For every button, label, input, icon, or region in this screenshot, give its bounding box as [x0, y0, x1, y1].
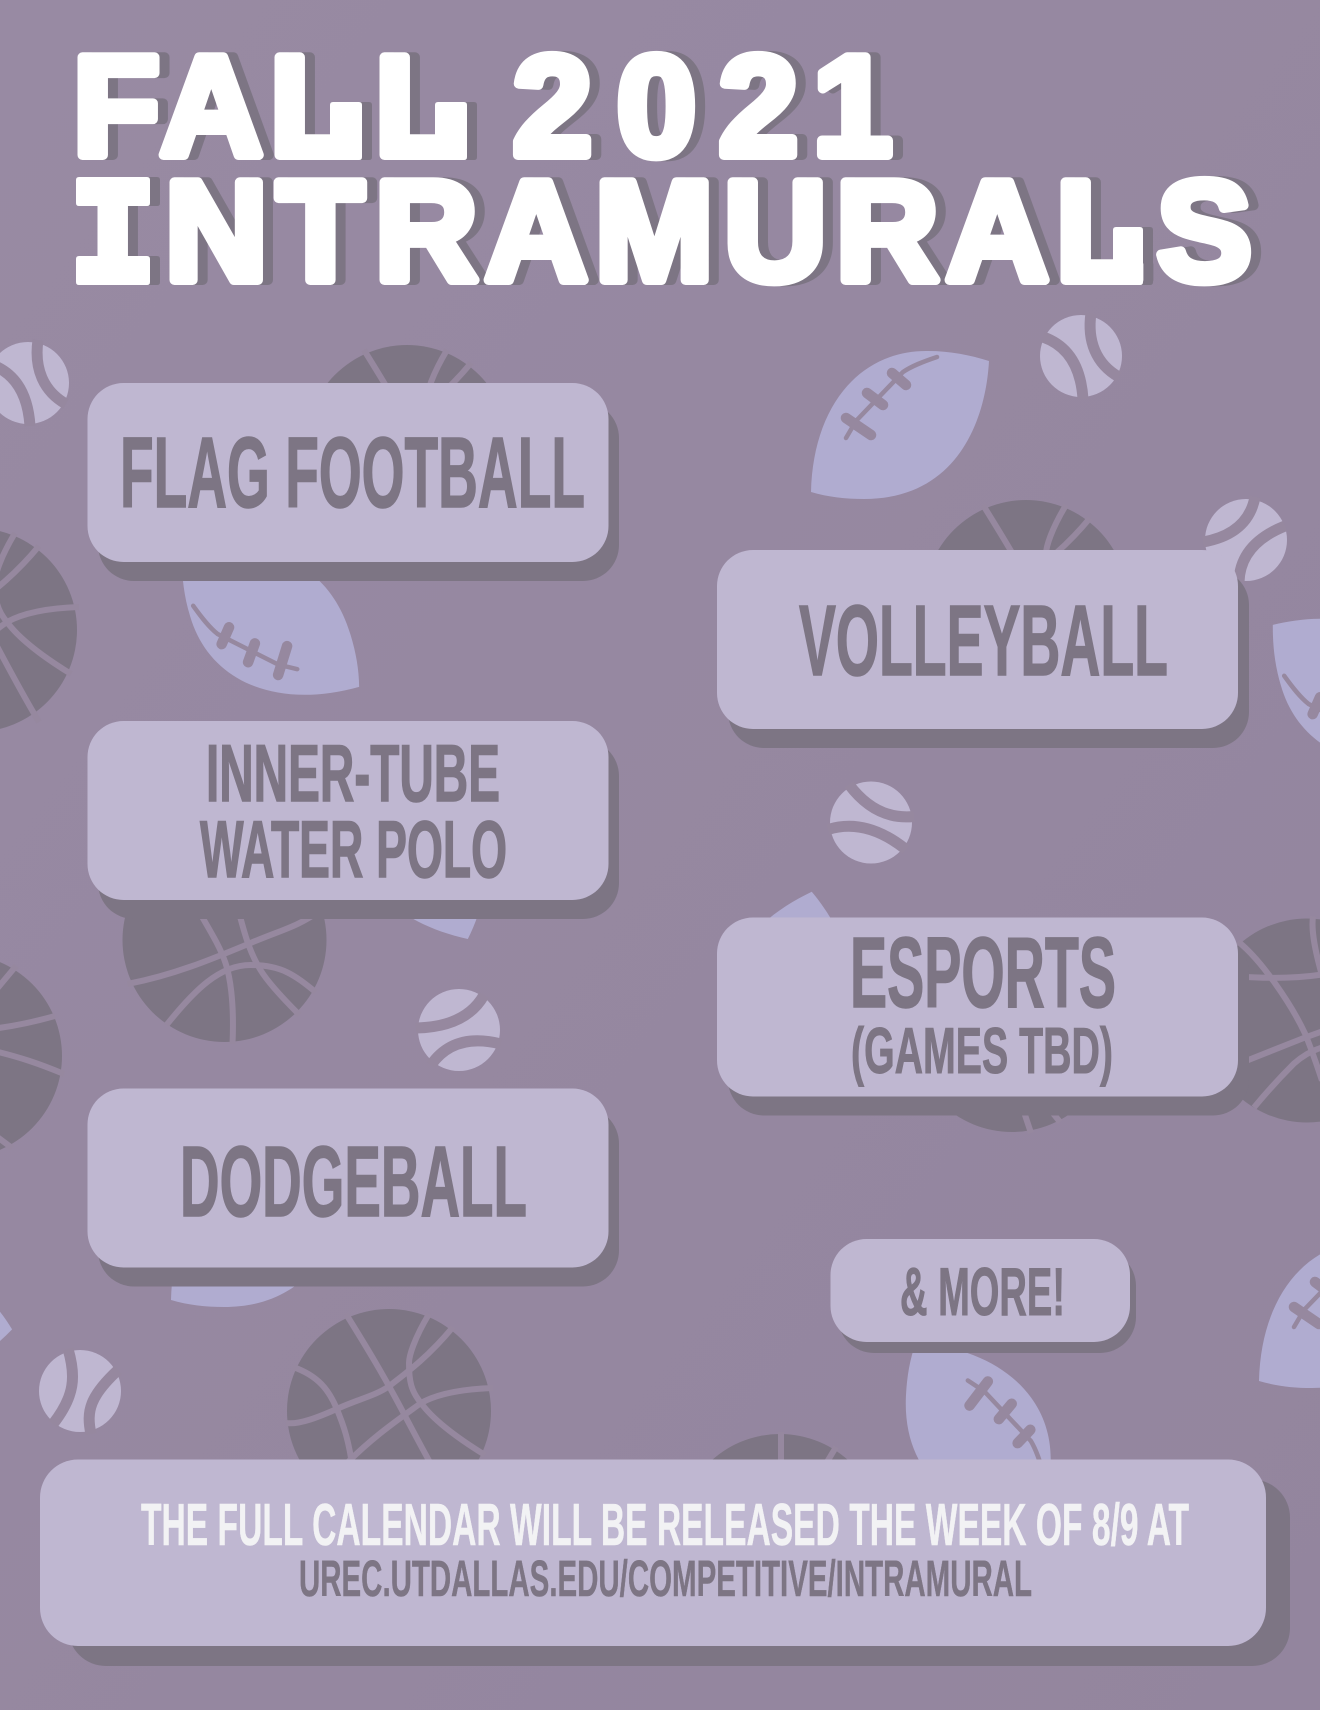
label: and more: & MORE!	[900, 1254, 1065, 1330]
baseball: above dodgeball	[416, 989, 501, 1071]
football: lower right edge	[1259, 1240, 1320, 1388]
title letter serifs and feet	[76, 102, 1143, 285]
panel: footer	[40, 1460, 1290, 1666]
panel: and more	[830, 1239, 1136, 1353]
basketball: below inner-tube panel	[122, 838, 326, 1044]
baseball: bottom left	[39, 1349, 121, 1434]
panel: inner-tube water polo	[88, 721, 619, 919]
label: water polo: WATER POLO	[200, 805, 507, 895]
basketball: lower centre-left	[286, 1309, 493, 1513]
football: below inner-tube panel	[329, 737, 509, 940]
basketball: upper left	[0, 528, 79, 732]
baseball: centre	[828, 782, 914, 864]
football: below dodgeball	[171, 1159, 349, 1307]
panel: esports	[717, 917, 1249, 1116]
title line 2: INTRAMURALS	[93, 152, 1252, 311]
panel: dodgeball	[88, 1088, 619, 1286]
football: above footer	[899, 1342, 1057, 1528]
baseball: top right	[1040, 313, 1122, 399]
basketball: lower left	[0, 954, 64, 1158]
football: below flag football	[172, 515, 366, 728]
football: right edge	[1263, 585, 1320, 798]
football: left edge tip	[0, 1203, 17, 1433]
basketball: below esports	[910, 928, 1114, 1133]
label: flag football: FLAG FOOTBALL	[120, 417, 585, 529]
label: dodgeball: DODGEBALL	[180, 1126, 527, 1238]
baseball: top left	[0, 340, 69, 426]
basketball: right of esports	[1205, 916, 1320, 1122]
title	[73, 27, 1252, 311]
panel: volleyball	[717, 550, 1249, 748]
football: top right	[811, 351, 989, 499]
baseball: above volleyball right	[1203, 497, 1287, 582]
label: inner-tube: INNER-TUBE	[206, 729, 500, 819]
basketball: top centre	[304, 345, 511, 549]
basketball: behind volleyball	[923, 500, 1130, 704]
title line 1: FALL 2021	[73, 27, 892, 186]
label: esports: ESPORTS	[850, 917, 1116, 1029]
label: games tbd: (GAMES TBD)	[851, 1014, 1113, 1087]
panel: flag football	[88, 383, 619, 581]
basketball: behind footer centre	[678, 1432, 882, 1638]
baseball: hidden behind footer	[976, 1584, 1058, 1666]
football: above esports	[675, 884, 906, 1114]
